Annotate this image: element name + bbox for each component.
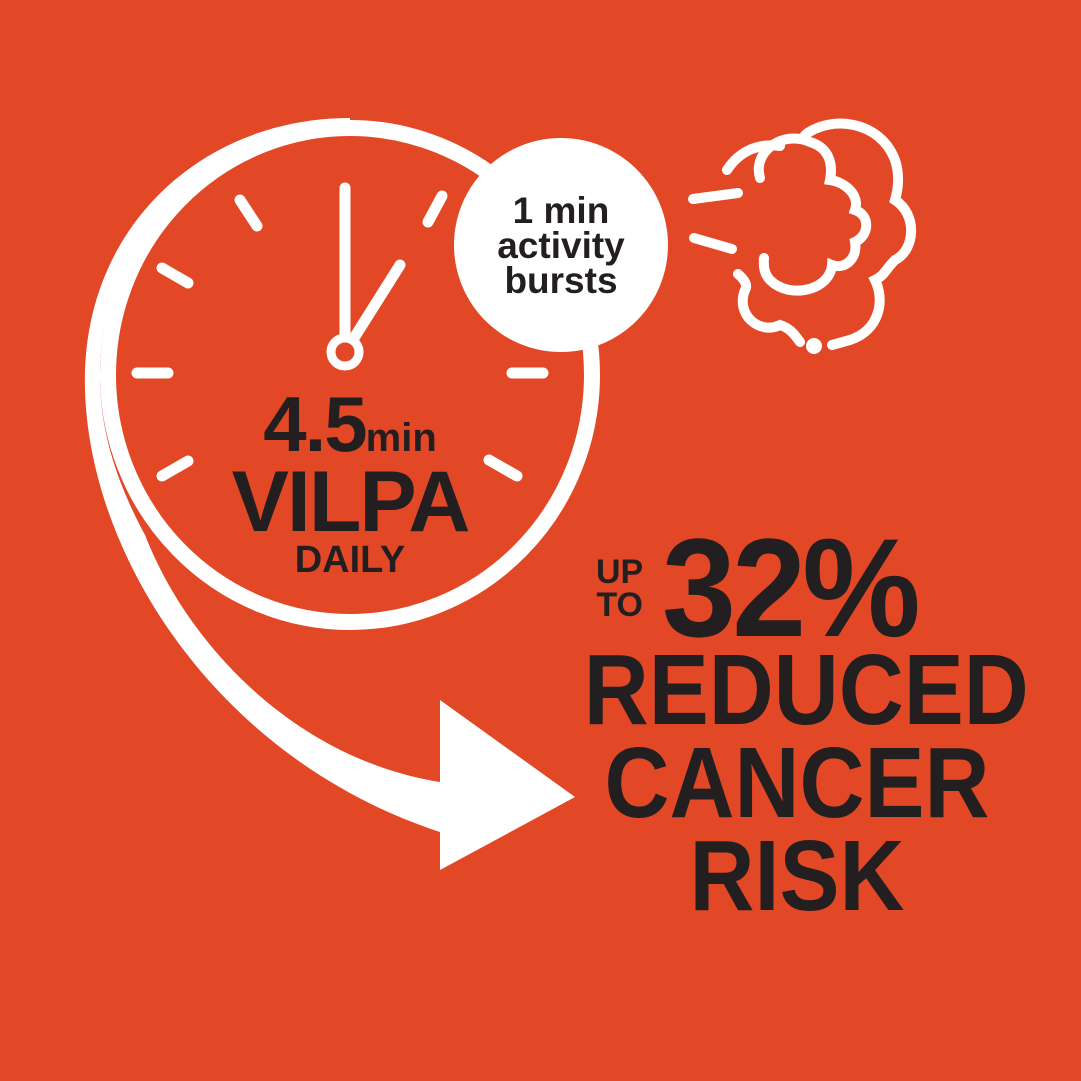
- bubble text: 1 min activity bursts: [497, 190, 625, 301]
- stat: up to 32%: [596, 553, 643, 624]
- clock face ring: [108, 128, 592, 622]
- clock ticks: [137, 196, 543, 476]
- stat label: reduced cancer risk: REDUCED: [584, 634, 1029, 746]
- clock text: 4.5 min VILPA DAILY: 4.5min: [263, 380, 437, 468]
- bubble text: 1 min activity bursts: 1 min: [513, 190, 609, 231]
- stat: up to 32%: UP: [596, 553, 643, 591]
- swoosh arrow: [85, 118, 575, 870]
- bubble circle: [454, 138, 668, 352]
- clock hands: [331, 188, 400, 366]
- stat label: reduced cancer risk: RISK: [689, 820, 905, 932]
- icon: breath cloud: [693, 124, 911, 349]
- bubble text: 1 min activity bursts: activity: [497, 225, 625, 266]
- clock text: 4.5 min VILPA DAILY: DAILY: [295, 539, 405, 581]
- bubble text: 1 min activity bursts: bursts: [504, 260, 618, 301]
- clock text: 4.5 min VILPA DAILY: VILPA: [232, 454, 468, 550]
- stat label: reduced cancer risk: CANCER: [604, 727, 990, 839]
- stat label: reduced cancer risk: [584, 634, 1029, 932]
- text: 32%: [662, 509, 917, 666]
- clock text: 4.5 min VILPA DAILY: [232, 380, 468, 581]
- stat: up to 32%: TO: [596, 586, 643, 624]
